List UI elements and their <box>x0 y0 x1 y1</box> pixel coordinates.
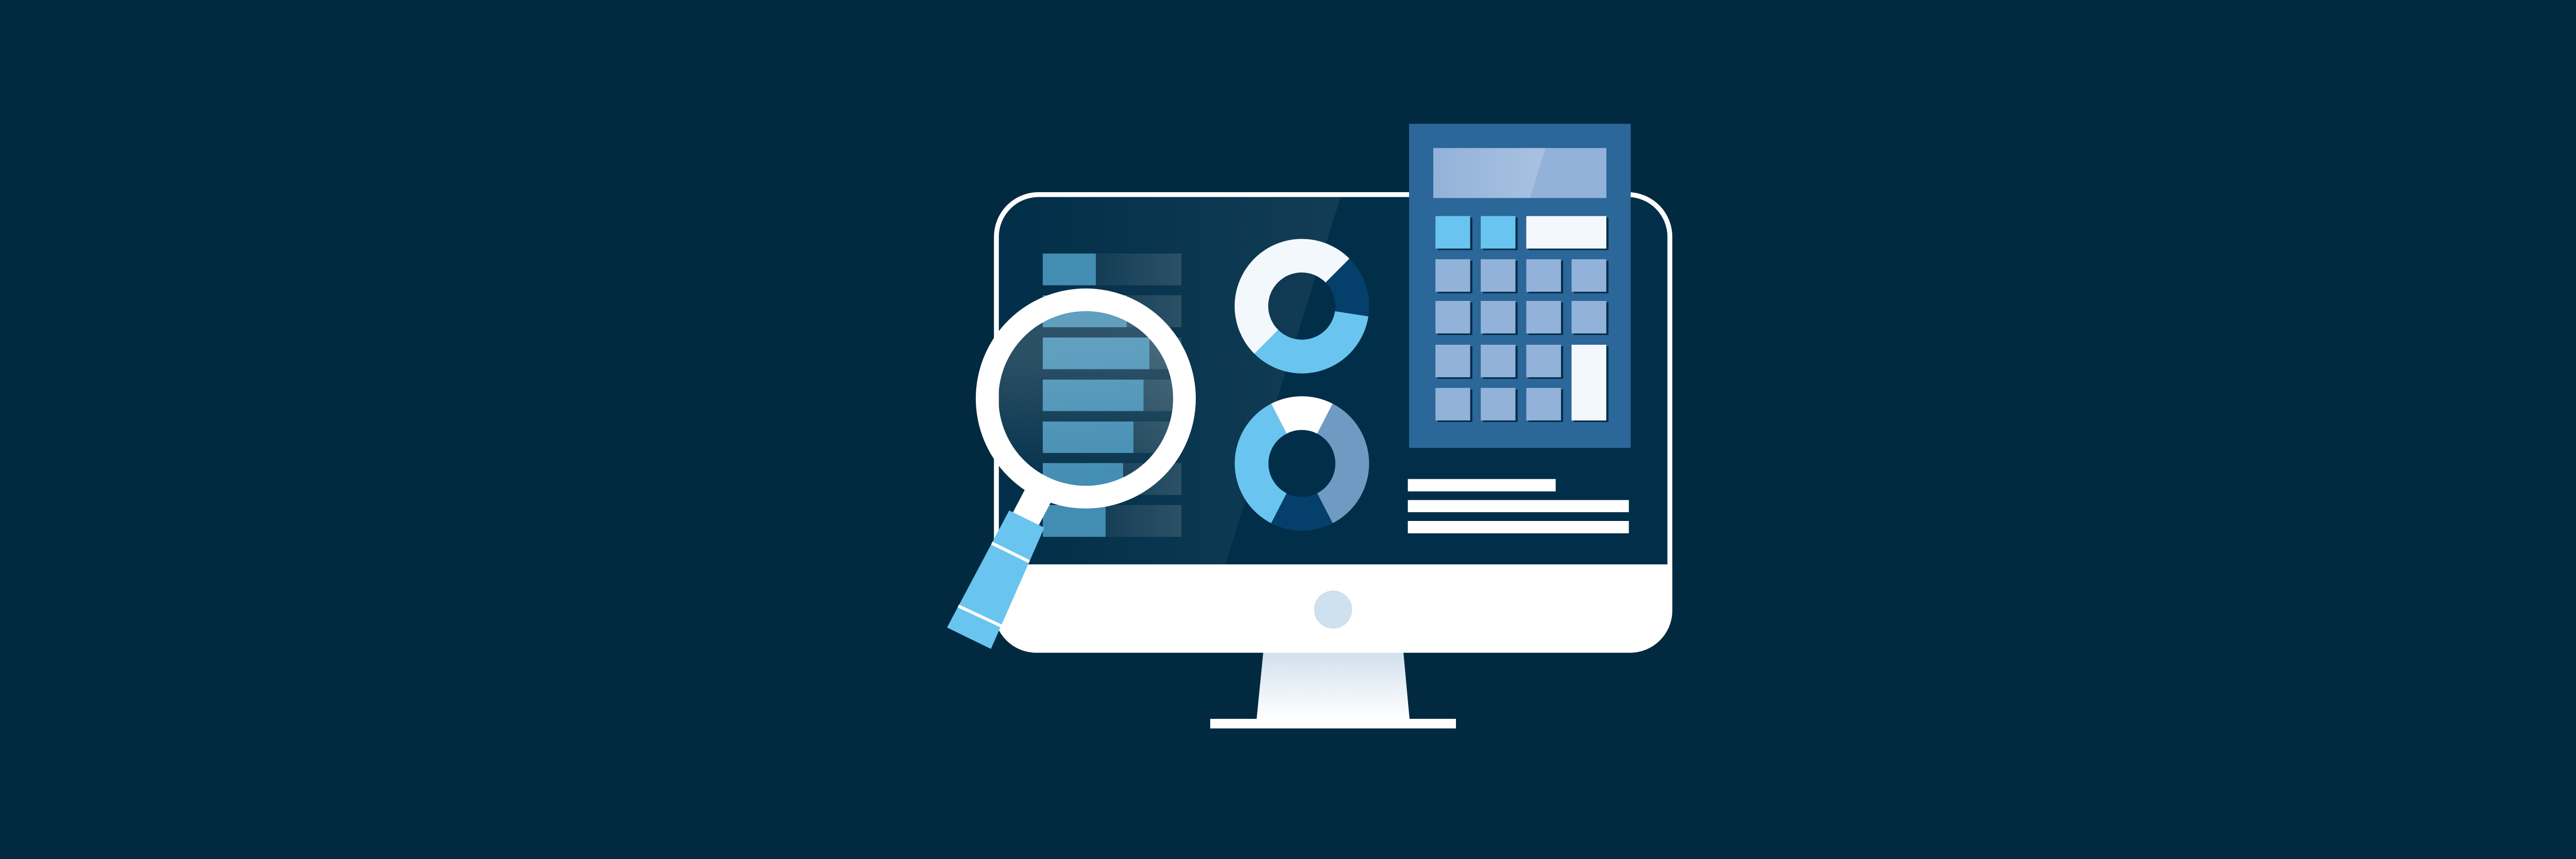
calculator body <box>1409 124 1631 448</box>
calculator <box>1409 124 1631 448</box>
donut chart: top <box>1234 239 1369 374</box>
display shine <box>1433 148 1546 198</box>
magnifying glass <box>947 289 1196 649</box>
screen shine <box>999 197 1341 565</box>
text lines <box>1408 479 1629 533</box>
monitor stand <box>1210 652 1456 729</box>
monitor chin <box>994 565 1672 653</box>
power button <box>1314 591 1352 629</box>
monitor <box>994 195 1672 653</box>
key shadows <box>1437 217 1608 422</box>
monitor screen <box>996 195 1670 567</box>
donut chart: bottom <box>1235 396 1369 531</box>
keys: number grid <box>1435 259 1606 420</box>
calculator display <box>1433 148 1606 198</box>
handle <box>947 511 1044 649</box>
lens ring <box>976 289 1196 509</box>
bar chart <box>1043 254 1181 537</box>
keys: top row <box>1435 216 1606 248</box>
handle stripe: lower <box>958 606 1002 626</box>
key: tall <box>1571 345 1606 420</box>
handle stripe: upper <box>992 543 1029 562</box>
handle neck <box>1005 490 1051 541</box>
lens glass <box>998 311 1174 486</box>
